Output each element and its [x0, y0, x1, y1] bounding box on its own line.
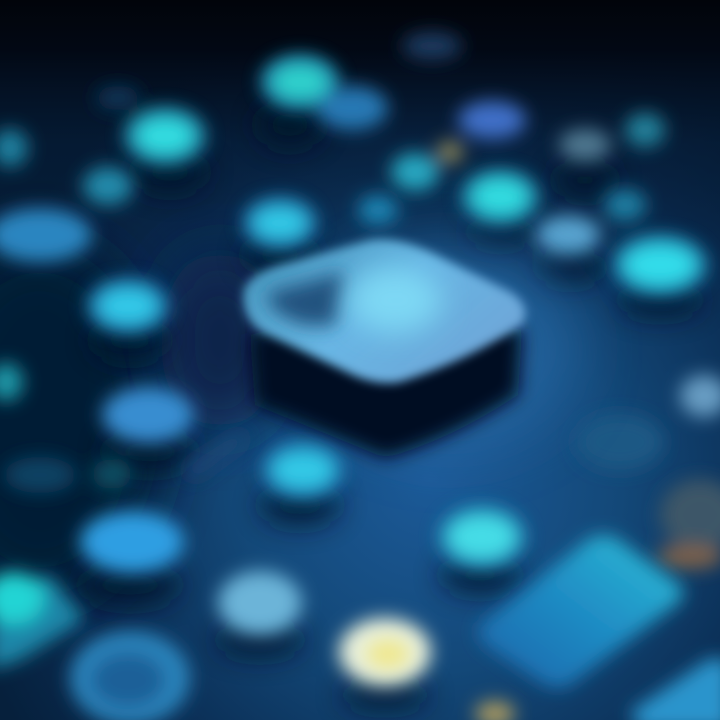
platform: top face	[243, 239, 525, 383]
tablet card	[478, 535, 683, 688]
platform: highlight	[349, 268, 441, 332]
corner card	[630, 658, 720, 720]
node halos	[86, 54, 708, 570]
node shadows	[80, 103, 702, 709]
nodes: lower row	[0, 449, 720, 720]
platform: dark body	[250, 300, 522, 458]
platform: inner recess	[269, 272, 345, 325]
central platform	[243, 239, 525, 458]
nodes: middle row	[0, 177, 720, 493]
node: bright white light	[339, 618, 431, 686]
platform glow	[320, 250, 580, 450]
nodes: upper row	[0, 32, 665, 205]
node: ring	[70, 631, 190, 720]
